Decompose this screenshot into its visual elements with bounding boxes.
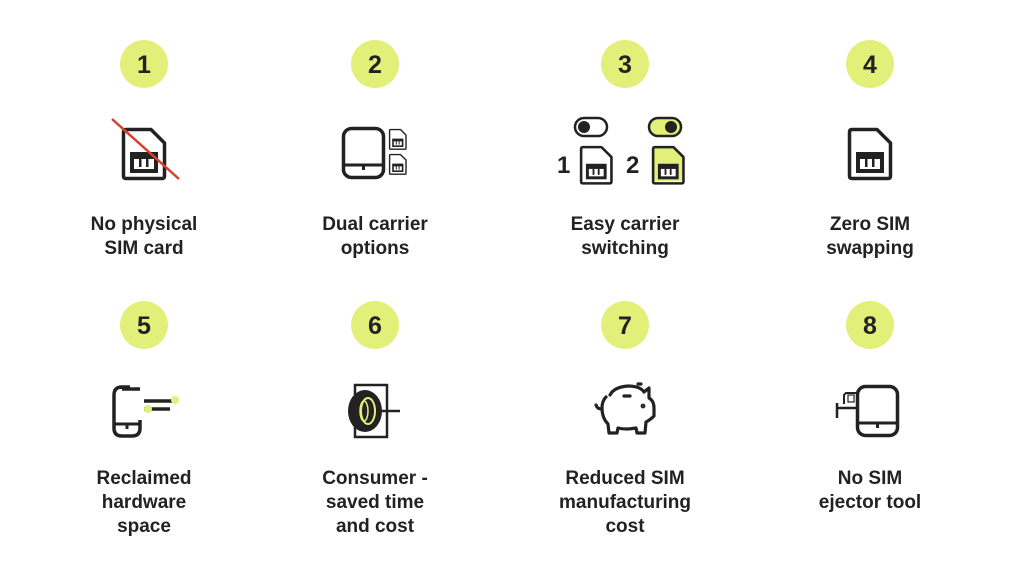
label 2: Dual carrier — [322, 214, 428, 235]
icon: SIM — [850, 130, 890, 178]
icon: phone with tray — [836, 386, 898, 436]
label 6: saved time — [326, 492, 424, 513]
label 5: hardware — [102, 492, 186, 513]
item 1: no physical SIM card — [91, 40, 197, 259]
badge 7: 7 — [618, 312, 632, 340]
label 1: SIM card — [104, 238, 184, 259]
icon: piggy bank — [596, 384, 654, 433]
label 4: swapping — [826, 238, 914, 259]
item 2: dual carrier — [322, 40, 428, 259]
label 3: switching — [581, 238, 669, 259]
badge 5: 5 — [137, 312, 151, 340]
icon: toggles and SIMs: 1 — [557, 152, 570, 179]
icon: crossed SIM — [112, 119, 179, 179]
item 4: zero SIM swapping — [826, 40, 914, 259]
badge 1 — [120, 40, 168, 88]
label 6: Consumer - — [322, 468, 428, 489]
badge 8: 8 — [863, 312, 877, 340]
item 5 — [96, 301, 192, 537]
badge 3: 3 — [618, 51, 632, 79]
badge 5 — [120, 301, 168, 349]
badge 6: 6 — [368, 312, 382, 340]
label 3: Easy carrier — [571, 214, 680, 235]
item 6 — [322, 301, 428, 537]
badge 6 — [351, 301, 399, 349]
label 5: space — [117, 516, 171, 537]
badge 2 — [351, 40, 399, 88]
badge 3 — [601, 40, 649, 88]
label 8: No SIM — [838, 468, 902, 489]
label 7: Reduced SIM — [565, 468, 685, 489]
label 8: ejector tool — [819, 492, 921, 513]
item 8 — [819, 301, 921, 513]
label 7: cost — [605, 516, 645, 537]
badge 7 — [601, 301, 649, 349]
icon: coin in slot — [348, 385, 400, 437]
item 7 — [559, 301, 691, 537]
icon: toggles and SIMs: 2 — [626, 152, 639, 179]
item 3: easy switching — [557, 40, 683, 259]
badge 4 — [846, 40, 894, 88]
label 6: and cost — [336, 516, 415, 537]
icon: phone with two SIMs — [344, 128, 406, 178]
icon: phone with sliders — [114, 387, 179, 436]
badge 2: 2 — [368, 51, 382, 79]
badge 1: 1 — [137, 51, 151, 79]
icon: toggles and SIMs — [557, 118, 683, 183]
label 1: No physical — [91, 214, 197, 235]
label 2: options — [341, 238, 409, 259]
label 7: manufacturing — [559, 492, 691, 513]
label 4: Zero SIM — [830, 214, 910, 235]
badge 4: 4 — [863, 51, 877, 79]
badge 8 — [846, 301, 894, 349]
label 5: Reclaimed — [96, 468, 192, 489]
